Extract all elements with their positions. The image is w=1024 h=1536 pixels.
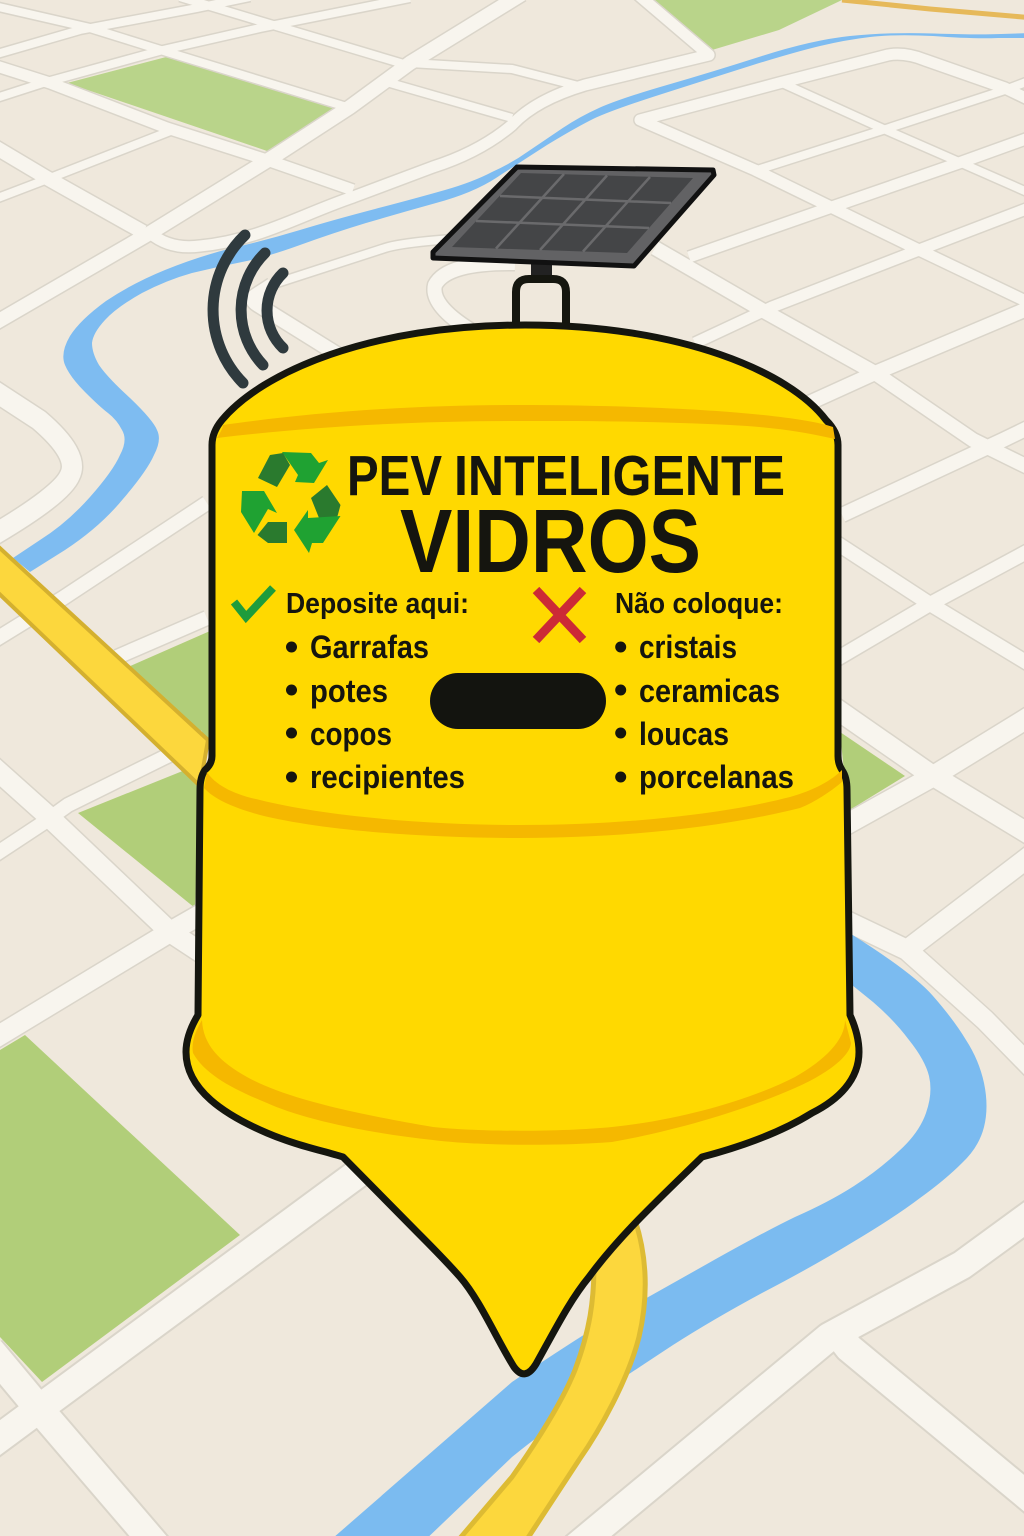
lower river <box>325 934 986 1536</box>
bottom band <box>193 1020 851 1145</box>
heading: deposit here: Deposite aqui: <box>286 588 469 620</box>
upper river <box>13 33 1024 572</box>
list: rejected materials: ceramicas <box>639 673 780 709</box>
top band <box>217 405 835 439</box>
solar panel <box>433 167 714 328</box>
icon: recycling symbol <box>241 452 340 553</box>
yellow road upper left <box>0 539 208 786</box>
panel cells <box>452 173 693 253</box>
heading: do not place: Não coloque: <box>615 588 783 620</box>
panel frame <box>433 167 714 266</box>
list: accepted glass: Garrafas <box>310 629 429 665</box>
list: rejected materials <box>615 629 794 795</box>
title: PEV INTELIGENTE: PEV <box>347 444 442 508</box>
list: rejected materials: porcelanas <box>639 759 794 795</box>
list: accepted glass <box>286 629 465 795</box>
panel: accepted items <box>234 588 469 795</box>
heading: VIDROS: VIDROS <box>400 492 701 592</box>
panel: rejected items <box>536 588 794 795</box>
icon: red cross <box>536 590 583 640</box>
deposit slot <box>430 673 606 729</box>
yellow road bottom <box>450 1220 645 1536</box>
list: rejected materials: loucas <box>639 716 729 752</box>
icon: wireless signal arcs <box>213 235 283 383</box>
orange road top right <box>842 0 1024 18</box>
title: PEV INTELIGENTE: INTELIGENTE <box>454 444 785 508</box>
title: PEV INTELIGENTE <box>347 444 785 508</box>
middle band <box>204 770 842 838</box>
list: rejected materials: cristais <box>639 629 737 665</box>
list: accepted glass: copos <box>310 716 392 752</box>
list: accepted glass: recipientes <box>310 759 465 795</box>
panel bracket <box>516 262 566 328</box>
list: accepted glass: potes <box>310 673 388 709</box>
park areas <box>0 0 905 1382</box>
yellow bin pin body <box>186 325 859 1374</box>
icon: green check mark <box>234 588 273 617</box>
